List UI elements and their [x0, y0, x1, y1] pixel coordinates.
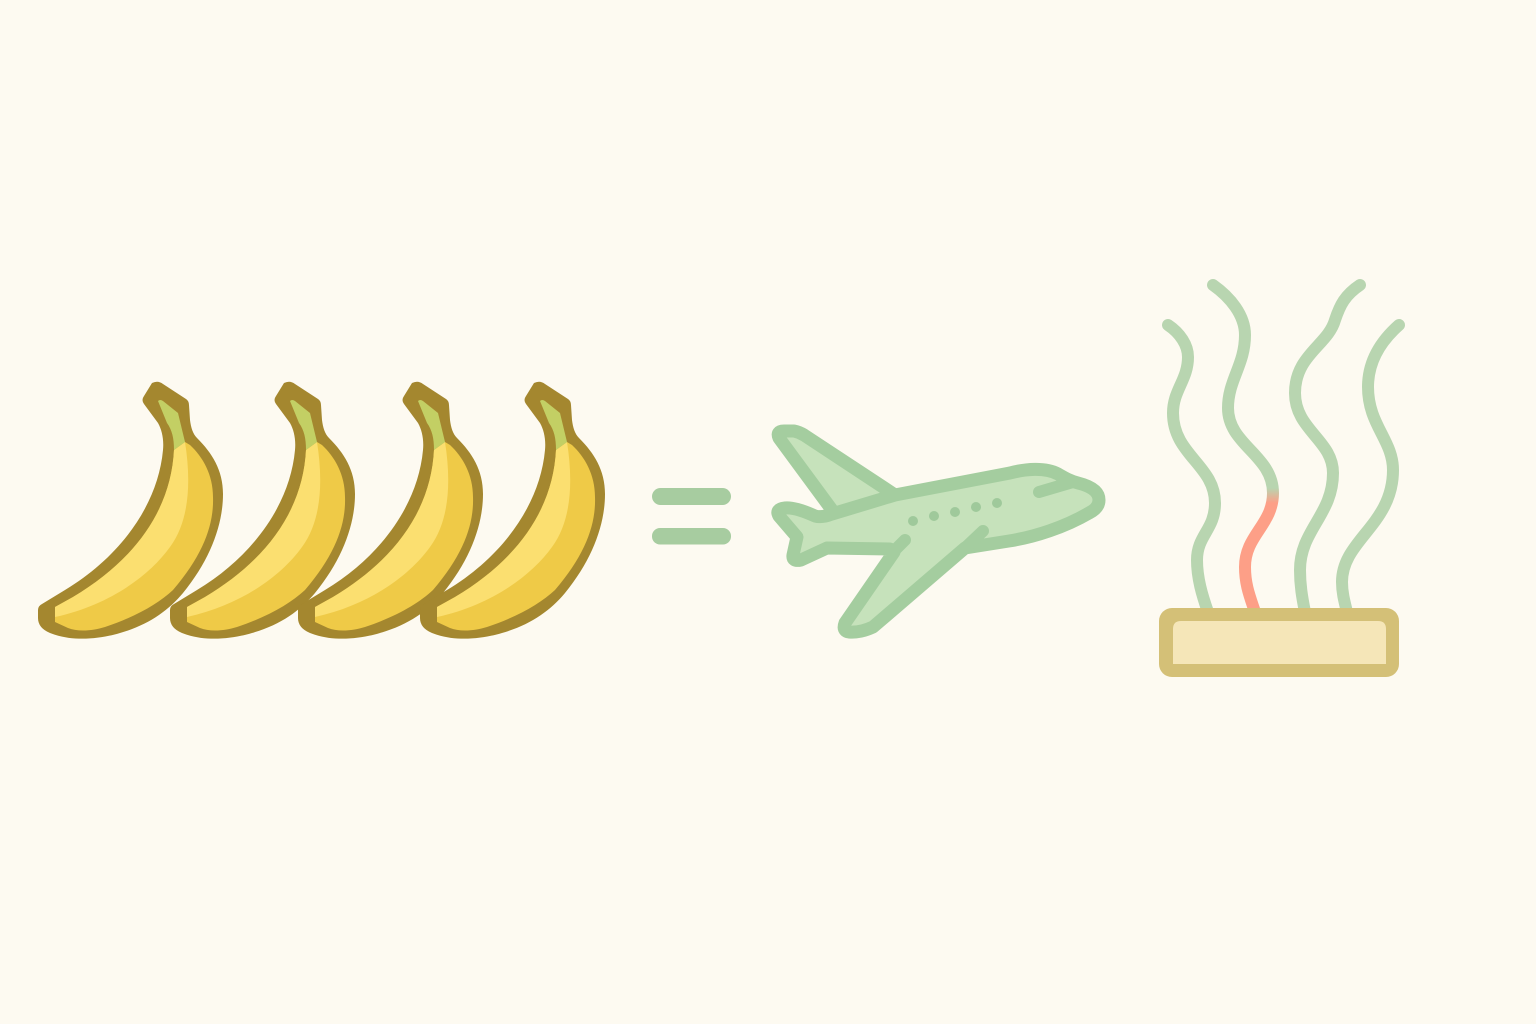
red highlighted smoke line — [1213, 285, 1273, 612]
icon: airplane — [778, 431, 1099, 632]
icon: banana 2 — [170, 382, 355, 639]
icon: banana 4 — [420, 382, 605, 639]
icon: equals sign — [652, 488, 731, 544]
icon: row of four bananas — [38, 382, 605, 639]
icon: banana 3 — [298, 382, 483, 639]
plane windows — [908, 498, 1002, 526]
tray — [1159, 608, 1399, 677]
icon: banana 1 — [38, 382, 223, 639]
icon: emissions rising from tray — [1159, 285, 1399, 677]
smoke lines — [1168, 285, 1399, 612]
